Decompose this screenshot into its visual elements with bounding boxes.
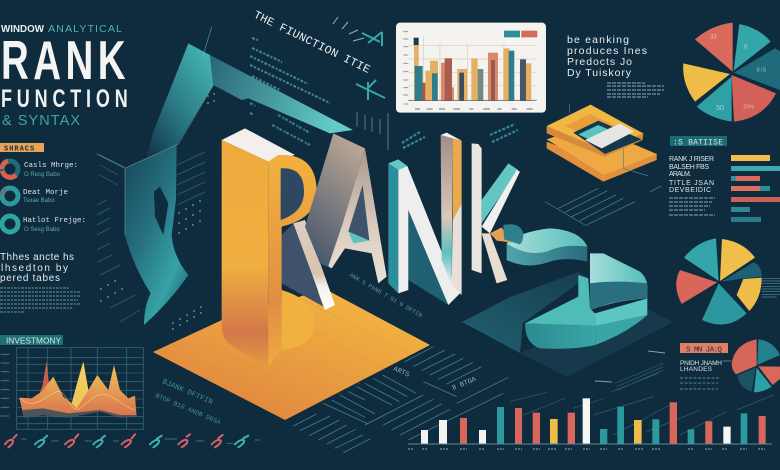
- text block: description: Thhes ancte hs: [0, 252, 74, 263]
- label: summary: S MN JA:Q: [686, 346, 722, 354]
- label: s bartise: [670, 136, 727, 148]
- area chart: [1, 348, 143, 429]
- label: shracs: [0, 143, 44, 154]
- text block: ranking produces: produces Ines: [567, 45, 647, 57]
- text block: rank rules: BALSEH FBS: [669, 164, 709, 171]
- label: shracs: SHRACS: [4, 146, 35, 154]
- wedge accent: [490, 227, 512, 243]
- pie chart 1: [683, 23, 780, 122]
- left legend items: [2, 161, 86, 233]
- pie chart 1: 50: [716, 103, 724, 112]
- text block: description: lhsedton by: [1, 263, 68, 274]
- text block: rank rules: [669, 156, 714, 194]
- icon: small arrow: [356, 32, 385, 100]
- text block: summary: LHANDES: [680, 366, 713, 373]
- text block: ranking produces: Dy Tuiskory: [567, 67, 632, 79]
- R leg: [293, 220, 335, 310]
- 3d letter N: [388, 133, 462, 305]
- rotated small text: [250, 38, 330, 103]
- orange floor plate: [153, 289, 430, 420]
- teal 3d shape: upper: [490, 224, 587, 265]
- icon: donut 1: [2, 161, 18, 177]
- R leg shadow: [282, 223, 323, 307]
- A back face: [305, 133, 365, 268]
- icon row: bottom left symbols: [5, 434, 260, 447]
- left legend items: Tsoae Babo: [23, 198, 55, 204]
- left legend items: O Sesg Babo: [24, 227, 60, 233]
- pie chart 1: 33: [710, 34, 717, 40]
- base right: [595, 298, 647, 326]
- back panel: [590, 253, 647, 310]
- chevron top band: [210, 55, 353, 133]
- small paragraph: [680, 378, 720, 389]
- R lower curve: [282, 290, 315, 350]
- heading: the function title: THE FIUNCTION ITIE: [251, 9, 372, 77]
- subtitle: syntax: & SYNTAX: [2, 113, 80, 129]
- chevron left band: [147, 43, 213, 157]
- rotated labels: [154, 272, 478, 426]
- lower dark platform: [520, 305, 673, 377]
- R front face: [222, 140, 268, 367]
- label: s bartise: :S BATIISE: [673, 138, 723, 148]
- text block: ranking produces: be eanking: [567, 34, 629, 46]
- R counter: [281, 168, 304, 220]
- text block: rank rules: ARALM.: [669, 171, 691, 178]
- R top face: [222, 128, 295, 162]
- icon: donut 2: [2, 188, 18, 204]
- text block: summary: [680, 360, 722, 373]
- small paragraph: [0, 288, 80, 312]
- teal 3d shape: lower: [525, 253, 647, 349]
- text block: description: pered tabes: [0, 273, 60, 284]
- title: function: FUNCTION: [1, 84, 128, 113]
- teal chevron arrow: [97, 27, 353, 325]
- text block: rank rules: TITLE JSAN: [669, 180, 714, 187]
- A crossbar: [348, 232, 369, 243]
- text block: ranking produces: Predocts Jo: [567, 56, 632, 68]
- chevron body: [125, 145, 188, 325]
- rotated small text lower: [250, 103, 310, 145]
- teal floor plane: [462, 272, 587, 353]
- heading: window analytical: WINDOW: [1, 23, 44, 35]
- label: summary: [680, 343, 728, 354]
- pie chart 3: [723, 339, 780, 392]
- heading: analytical: ANALYTICAL: [48, 23, 123, 35]
- left legend items: O Resg Babo: [24, 172, 61, 178]
- horizontal bars: [731, 155, 780, 222]
- pie chart 1: 8: [744, 44, 748, 50]
- small isometric text near chart: [402, 124, 518, 148]
- decorative hatch marks: [97, 152, 205, 322]
- legend swatches: [504, 31, 520, 37]
- base top: [525, 275, 595, 326]
- icon: donut 3: [2, 216, 18, 232]
- text block: rank rules: DEVBEIDIC: [669, 187, 711, 194]
- 3d letter K: [472, 143, 520, 283]
- text: item 1: Casls Mhrge:: [24, 162, 78, 170]
- text block: summary: PNIDH JNAMH: [680, 360, 722, 367]
- small paragraph: [607, 83, 664, 97]
- small paragraph: [669, 198, 715, 215]
- 3d letter R: [222, 128, 335, 367]
- rotated labels: BJANK DFTFIN: [161, 378, 214, 407]
- pie chart 2: [676, 238, 780, 325]
- rotated labels: ARTS: [392, 365, 410, 380]
- A front face: [328, 148, 387, 283]
- text: item 2: Deat Morje: [23, 189, 68, 197]
- text block: rank rules: RANK J RISER: [669, 156, 714, 163]
- bar chart bottom: [408, 398, 772, 449]
- base front: [525, 323, 595, 349]
- rotated labels: BTOP B10 ANDB D6SA: [154, 392, 222, 426]
- small arrows: [595, 351, 665, 382]
- text block: ranking produces: [567, 34, 647, 79]
- 3d letter A: [305, 133, 387, 283]
- R bowl: [268, 155, 317, 367]
- bar chart panel: [396, 23, 546, 113]
- rotated labels: ANK 5 PANG 7 S1 9 DFTIN: [348, 272, 424, 319]
- pie chart 1: 8 IS: [757, 68, 767, 74]
- pie chart 1: 20%: [743, 104, 754, 110]
- text block: description: [0, 252, 74, 284]
- isometric layered block: [545, 104, 662, 226]
- diagonal guide lines bottom: [293, 347, 508, 453]
- label: investment: INVESTMONY: [6, 336, 62, 346]
- rotated labels: 8 BTGA: [451, 376, 478, 393]
- A counter: [348, 185, 369, 241]
- text: item 3: Hatlot Frejge:: [23, 217, 86, 225]
- title: rank: RANK: [1, 30, 126, 92]
